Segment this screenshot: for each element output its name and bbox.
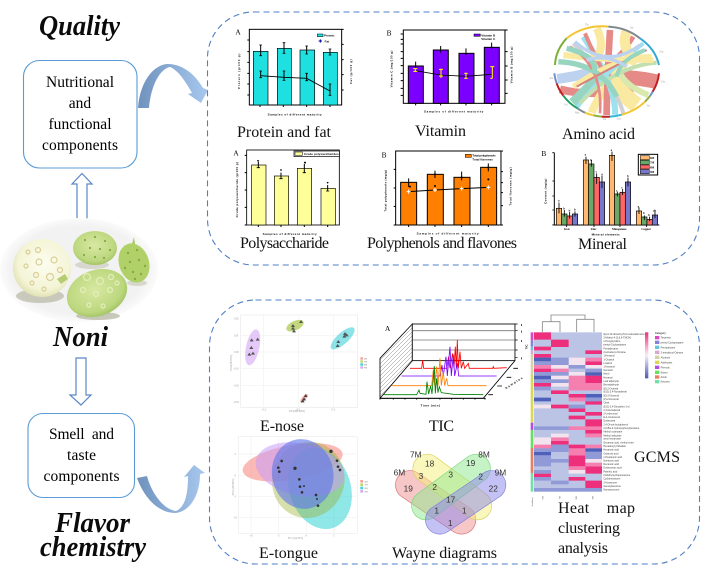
chord diagram: amino acid: Thr	[585, 24, 589, 27]
category legend: Esters	[661, 371, 668, 374]
chord diagram: amino acid: Tyr	[647, 105, 650, 108]
venn diagram: Wayne diagrams: 6M	[394, 467, 405, 477]
caption: polysaccharide: Polysaccharide	[240, 235, 329, 252]
bar chart: mineral: 7M	[650, 161, 654, 165]
scatter plot: E-tongue PCA: PC1 (64.33%)	[288, 537, 303, 540]
compound labels: Damascenone	[603, 489, 620, 492]
compound labels: Decanoic acid, methyl ester	[603, 441, 634, 444]
chord diagram: amino acid: Met	[575, 111, 580, 114]
bar chart: mineral: a	[585, 153, 587, 157]
category legend: Aldehydes	[661, 361, 673, 364]
arrow: curved arrow to quality panel	[138, 64, 208, 108]
scatter plot: E-nose PCA: 8M	[364, 363, 367, 366]
compound labels: Dodecanal	[603, 420, 616, 423]
category legend: Ketones	[661, 381, 671, 384]
column labels: 7M	[558, 495, 561, 499]
scatter plot: E-nose PCA: 0.0	[297, 408, 301, 411]
scatter plot: E-nose PCA: -0.02	[233, 384, 240, 387]
3D chromatogram: TIC	[380, 324, 528, 408]
chord diagram: amino acid: Ile	[603, 118, 607, 121]
scatter plot: E-tongue PCA: 5	[333, 535, 335, 538]
chord diagram: amino acid: Gly	[661, 81, 666, 84]
compound labels: 2,6-Bis-4-hydroxyphenylpropane	[603, 427, 640, 430]
compound labels: E-2-Undecenal	[603, 416, 620, 419]
scatter plot: E-tongue PCA: -5	[277, 535, 280, 538]
scatter plot: E-tongue PCA: 0	[235, 474, 237, 477]
caption: vitamin: Vitamin	[415, 123, 466, 140]
bar chart: protein and fat: Samples of different maturity	[268, 113, 322, 117]
compound labels: 1-Octanol	[603, 358, 615, 361]
scatter plot: E-nose PCA: -0.01	[233, 368, 240, 371]
scatter plot: E-tongue PCA	[231, 432, 368, 540]
title: Flavor chemistry: Flavor	[54, 508, 131, 539]
scatter plot: E-nose PCA: 0.3	[332, 408, 336, 411]
box: nutritional and functional components: Nutritional	[46, 74, 114, 91]
compound labels: (E)-6,10-dimethyl-5,9-undecadienone	[603, 333, 645, 336]
scatter plot: E-tongue PCA: -10	[249, 535, 254, 538]
compound labels: (E,E)-2,4-Nonadienal	[603, 391, 627, 394]
venn diagram: Wayne diagrams: 3	[448, 469, 453, 479]
box: smell and taste components: taste	[67, 447, 96, 464]
category bar	[531, 332, 533, 492]
compound labels: 2-Nonanone	[603, 481, 618, 484]
compound labels: pentyl-Cyclopropane	[603, 344, 627, 347]
compound labels: Octanoic acid	[603, 452, 619, 455]
bar chart: mineral: Zinc	[591, 227, 597, 231]
bar chart: mineral: d	[601, 172, 603, 176]
chord diagram: amino acid	[549, 24, 666, 121]
compound labels: 2-Methyl-4-(2,6,6-TMCH)	[603, 337, 631, 340]
compound labels: 1-Hexanol	[603, 355, 615, 358]
bar chart: vitamin: Vitamin C	[481, 37, 496, 41]
venn diagram: Wayne diagrams: 1	[448, 518, 453, 528]
compound labels	[603, 333, 645, 492]
bar chart: mineral	[541, 148, 659, 237]
caption: TIC: TIC	[429, 418, 454, 435]
bar chart: vitamin: Vitamin B	[481, 33, 496, 37]
venn diagram: Wayne diagrams: 19	[404, 483, 413, 493]
bar chart: protein and fat	[235, 28, 353, 117]
venn diagram: Wayne diagrams: 7M	[410, 449, 422, 459]
category legend: Pentadecane	[661, 346, 676, 349]
category legend	[655, 332, 684, 384]
arrow: hollow down arrow	[70, 358, 91, 405]
venn diagram: Wayne diagrams: 9M	[495, 467, 506, 477]
compound labels: (E)-2-Nonenal	[603, 394, 619, 397]
compound labels: Citral	[603, 402, 610, 405]
3D chromatogram: TIC: TIC	[524, 344, 528, 349]
column labels: Auxiliary	[531, 496, 534, 507]
heatmap: GCMS clustering	[531, 315, 684, 507]
panel: quality	[208, 12, 700, 265]
scatter plot: E-nose PCA	[229, 315, 367, 413]
arrow: curved arrow to flavor panel	[137, 465, 205, 513]
scatter plot: E-nose PCA: 6M	[364, 357, 367, 360]
scatter plot: E-nose PCA: 0.00	[234, 351, 239, 354]
compound labels: 2-tetradecyl-Oxirane	[603, 351, 626, 354]
category legend: Acids	[661, 376, 667, 379]
category legend: Phenols	[661, 366, 670, 369]
bar chart: mineral: c	[621, 185, 623, 189]
caption: E-tongue: E-tongue	[259, 545, 318, 562]
bar chart: protein and fat: Protein	[324, 34, 334, 38]
scatter plot: E-nose PCA: PC2(26.57%)	[229, 355, 233, 371]
caption: mineral: Mineral	[578, 236, 628, 253]
venn diagram: Wayne diagrams: 1	[462, 506, 467, 516]
bar chart: mineral: ab	[653, 208, 656, 212]
bar chart: polysaccharide: Crude polysaccharide (g/100 g)	[235, 162, 239, 217]
column labels: 9M	[592, 495, 595, 499]
scatter plot: E-nose PCA: -0.3	[262, 408, 267, 411]
bar chart: polyphenols and flavones: Samples of different maturity	[417, 232, 479, 236]
title: Flavor chemistry	[40, 508, 147, 563]
bar chart: mineral: b	[590, 158, 592, 162]
compound labels: (Z)-2-Decenal	[603, 398, 619, 401]
arrow: hollow up arrow	[72, 174, 92, 220]
compound labels: (E,E)-2,4-Decadien-1-ol	[603, 405, 630, 408]
bar chart: mineral: b	[563, 206, 565, 210]
bar chart: polyphenols and flavones	[382, 150, 513, 236]
compound labels: n-Heptanoic acid	[603, 456, 623, 459]
bar chart: polysaccharide: Crude polysaccharides	[304, 152, 339, 156]
venn diagram: Wayne diagrams: 17	[446, 495, 456, 505]
compound labels: Geraniol	[603, 369, 613, 372]
compound labels: Decanoic acid	[603, 463, 620, 466]
compound labels: 1-Nonanol	[603, 365, 615, 368]
box: nutritional and functional components: functional	[48, 116, 112, 133]
bar chart: mineral: b	[574, 208, 576, 212]
bar chart: mineral: a	[558, 199, 560, 203]
bar chart: mineral: 6M	[650, 156, 654, 160]
compound labels: Dodecanoic acid	[603, 467, 622, 470]
category legend: Alcohols	[661, 356, 671, 359]
compound labels: 2,4-Di-tert-butylphenol	[603, 423, 628, 426]
bar chart: polyphenols and flavones: Total flavones	[472, 157, 493, 161]
category legend: Terpenes	[661, 337, 672, 340]
3D chromatogram: TIC: Samples	[504, 376, 524, 390]
scatter plot: E-nose PCA: 7M	[364, 360, 367, 363]
caption: heat map clustering analysis: clustering	[558, 520, 620, 537]
bar chart: mineral: B	[541, 149, 546, 158]
compound labels: Geranylacetone	[603, 485, 621, 488]
bar chart: mineral: c	[596, 170, 598, 174]
box: smell and taste components: Smell and	[49, 426, 114, 443]
3D chromatogram: TIC: A	[385, 324, 391, 333]
compound labels: Nonanoic acid	[603, 460, 620, 463]
venn diagram: Wayne diagrams	[390, 448, 511, 540]
scatter plot: E-tongue PCA: PC2 (25.92%)	[231, 479, 235, 495]
scatter plot: E-nose PCA: 0.01	[234, 335, 239, 338]
bar chart: mineral: b	[569, 208, 571, 212]
venn diagram: Wayne diagrams: 22	[489, 483, 498, 493]
caption: E-nose: E-nose	[260, 418, 304, 435]
scatter plot: E-tongue PCA: -5	[234, 495, 237, 498]
caption: Wayne diagrams: Wayne diagrams	[392, 545, 497, 562]
compound labels: Hexadecyl phthalate	[603, 445, 626, 448]
bar chart: mineral: a	[611, 148, 613, 152]
category legend: pentyl-Cyclopropane	[661, 341, 684, 344]
image: noni fruits	[0, 218, 158, 325]
column labels	[531, 495, 595, 507]
bar chart: polyphenols and flavones: Total flavones (mg/g)	[509, 167, 513, 206]
bar chart: vitamin: Vitamin C (mg/100 g)	[389, 51, 393, 87]
bar chart: vitamin	[387, 28, 514, 114]
venn diagram: Wayne diagrams: 18	[425, 459, 435, 469]
venn diagram: Wayne diagrams: 1	[434, 506, 439, 516]
bar chart: polysaccharide: A	[233, 148, 239, 157]
venn diagram: Wayne diagrams: 8M	[478, 449, 490, 459]
bar chart: mineral: Mineral elements	[592, 233, 620, 237]
compound labels: Methyl salicylate	[603, 434, 622, 437]
compound labels: 2,4-Decadienal	[603, 409, 620, 412]
box: smell and taste components: components	[44, 468, 120, 485]
column labels: 8M	[575, 495, 578, 499]
chord diagram: amino acid: Glu	[659, 51, 664, 54]
bar chart: mineral: Manganese	[612, 227, 627, 231]
heatmap cells	[534, 332, 602, 492]
category legend: Category	[655, 332, 666, 335]
venn diagram: Wayne diagrams: 19	[466, 458, 476, 468]
venn diagram: Wayne diagrams: 2	[478, 471, 483, 481]
bar chart: polysaccharide	[233, 148, 339, 236]
compound labels: Pentadecane	[603, 347, 619, 350]
compound labels: Hexanal	[603, 376, 613, 379]
bar chart: mineral: b	[648, 213, 650, 217]
box: nutritional and functional components: components	[42, 137, 118, 154]
bar chart: mineral: Iron	[564, 227, 570, 231]
box: nutritional and functional components	[24, 60, 137, 168]
title: Quality: Quality	[39, 11, 121, 42]
chord diagram: amino acid: Ser	[630, 26, 634, 29]
column labels: 6M	[542, 495, 545, 499]
compound labels: Benzaldehyde	[603, 384, 620, 387]
scatter plot: E-nose PCA: 9M	[364, 366, 367, 369]
scatter plot: E-tongue PCA: 8M	[364, 487, 368, 490]
bar chart: polysaccharide: Samples of different maturity	[263, 232, 317, 236]
compound labels: Methyl octanoate	[603, 431, 623, 434]
caption: heat map clustering analysis	[558, 500, 635, 557]
compound labels: Palmitic acid	[603, 470, 618, 473]
compound labels: n-Hexylpyridine	[603, 340, 621, 343]
scatter plot: E-tongue PCA: 6M	[364, 480, 368, 483]
bar chart: mineral: c	[616, 189, 618, 193]
compound labels: amyl hexanoate	[603, 438, 621, 441]
scatter plot: E-tongue PCA: -10	[233, 516, 238, 519]
scatter plot: E-tongue PCA: 7M	[364, 484, 368, 487]
compound labels: Linalool	[603, 362, 612, 365]
panel: flavor chemistry	[210, 300, 700, 564]
bar chart: protein and fat: Protein (g/100 g)	[237, 54, 241, 89]
venn diagram: Wayne diagrams: 3	[419, 471, 424, 481]
compound labels: (E)-2-Octenal	[603, 387, 619, 390]
scatter plot: E-tongue PCA: 0	[305, 535, 307, 538]
title: Flavor chemistry: chemistry	[40, 532, 147, 563]
bar chart: vitamin: Vitamin B (mg/100 g)	[510, 47, 514, 83]
bar chart: polyphenols and flavones: B	[382, 150, 387, 159]
compound labels: 2-Undecenal	[603, 412, 618, 415]
compound labels: Leaf aldehyde	[603, 380, 620, 383]
caption: heat map clustering analysis: Heat map	[558, 500, 635, 517]
bar chart: mineral: Copper	[641, 227, 652, 231]
caption: amino acid: Amino acid	[562, 126, 635, 143]
title: Noni: Noni	[52, 322, 108, 353]
bar chart: protein and fat: Fat	[325, 39, 329, 43]
bar chart: mineral: a	[638, 204, 640, 208]
bar chart: protein and fat: A	[235, 28, 241, 37]
bar chart: protein and fat: Fat (g/100 g)	[349, 59, 353, 84]
bar chart: mineral: b	[627, 174, 629, 178]
scatter plot: E-nose PCA: PC1(68.39%)	[289, 409, 305, 413]
caption: heat map clustering analysis: analysis	[558, 540, 608, 557]
colour scale	[645, 332, 648, 378]
scatter plot: E-tongue PCA: 9M	[364, 490, 368, 493]
bar chart: polyphenols and flavones: Total polyphenols (mg/g)	[384, 170, 388, 212]
chord diagram: amino acid: Leu	[617, 117, 621, 120]
scatter plot: E-nose PCA: -0.03	[233, 401, 240, 404]
caption: GCMS: GCMS	[634, 449, 680, 466]
box: nutritional and functional components: and	[69, 95, 91, 112]
scatter plot: E-tongue PCA: 5	[235, 453, 237, 456]
bar chart: mineral: Content (mg/g)	[544, 179, 548, 204]
chord diagram: amino acid: Val	[564, 104, 568, 107]
compound labels: Hexanoic acid	[603, 449, 620, 452]
scatter plot: E-nose PCA: 0.02	[234, 318, 239, 321]
bar chart: vitamin: B	[387, 28, 392, 37]
dendrogram	[542, 315, 594, 332]
chord diagram: amino acid: Ala	[549, 77, 554, 80]
compound labels: 2-Methylcyclopentanone	[603, 474, 631, 477]
caption: polyphenols and flavones: Polyphenols and flavones	[367, 235, 517, 252]
bar chart: polyphenols and flavones: Total polyphenols	[472, 154, 496, 158]
bar chart: mineral: 8M	[650, 165, 654, 169]
category legend: 2-tetradecyl-Oxirane	[661, 351, 684, 354]
box: smell and taste components	[28, 414, 134, 498]
caption: protein and fat: Protein and fat	[237, 124, 332, 141]
compound labels: Nerol	[603, 373, 610, 376]
bar chart: mineral: b	[643, 211, 645, 215]
bar chart: vitamin: Samples of different maturity	[424, 110, 484, 114]
3D chromatogram: TIC: Time (min)	[421, 404, 440, 408]
compound labels: Cyclohexanone	[603, 478, 621, 481]
venn diagram: Wayne diagrams: 2	[432, 482, 437, 492]
bar chart: mineral: 9M	[650, 170, 654, 174]
